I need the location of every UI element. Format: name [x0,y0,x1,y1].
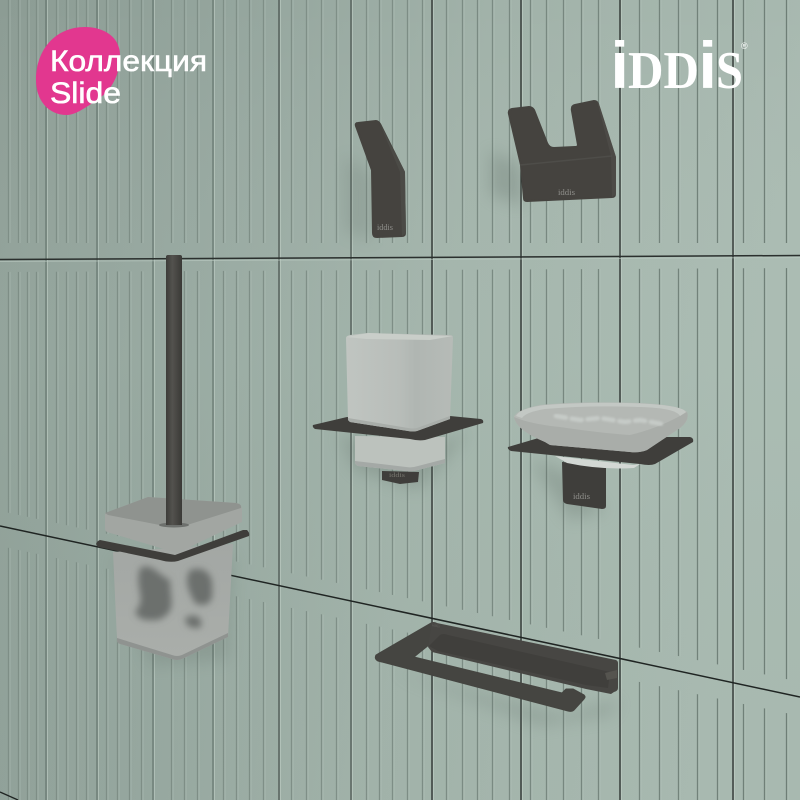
logo: IDDIS: i [610,28,629,102]
back bar [428,622,618,694]
glass dish [514,402,688,452]
white sliver under shelf [555,456,640,468]
glass cup [346,333,453,432]
lower glass [355,436,445,471]
logo: IDDIS: DD [628,42,699,100]
soap dish [508,402,693,520]
heading: collection name: Коллекция [50,45,207,78]
heading: collection name: Slide [50,77,121,110]
hook: double robe hook: iddis [558,188,575,197]
tumbler holder: iddis [389,473,406,479]
heading: collection name [50,45,207,110]
metal base [382,471,419,484]
tumbler holder [313,333,483,490]
logo: IDDIS: S [716,42,743,100]
lid [105,497,242,553]
towel holder: iddis [432,622,441,629]
logo: IDDIS: ® [741,41,748,51]
soap dish: iddis [573,492,590,501]
towel holder [375,622,620,725]
brush head seen through glass [135,566,212,628]
badge: pink blob [36,27,120,115]
rod [166,255,182,526]
hook: single robe hook [345,121,406,240]
logo: IDDIS [610,28,748,102]
wall bracket [562,462,606,509]
metal shelf [313,416,483,440]
hook: double robe hook [490,101,616,205]
metal shelf [508,437,693,465]
logo: IDDIS: i [698,28,717,102]
toilet brush holder [96,255,249,665]
metal shelf [96,530,249,562]
frosted glass body [113,544,233,660]
arm and left frame [375,622,585,711]
hook: single robe hook: iddis [377,223,393,232]
